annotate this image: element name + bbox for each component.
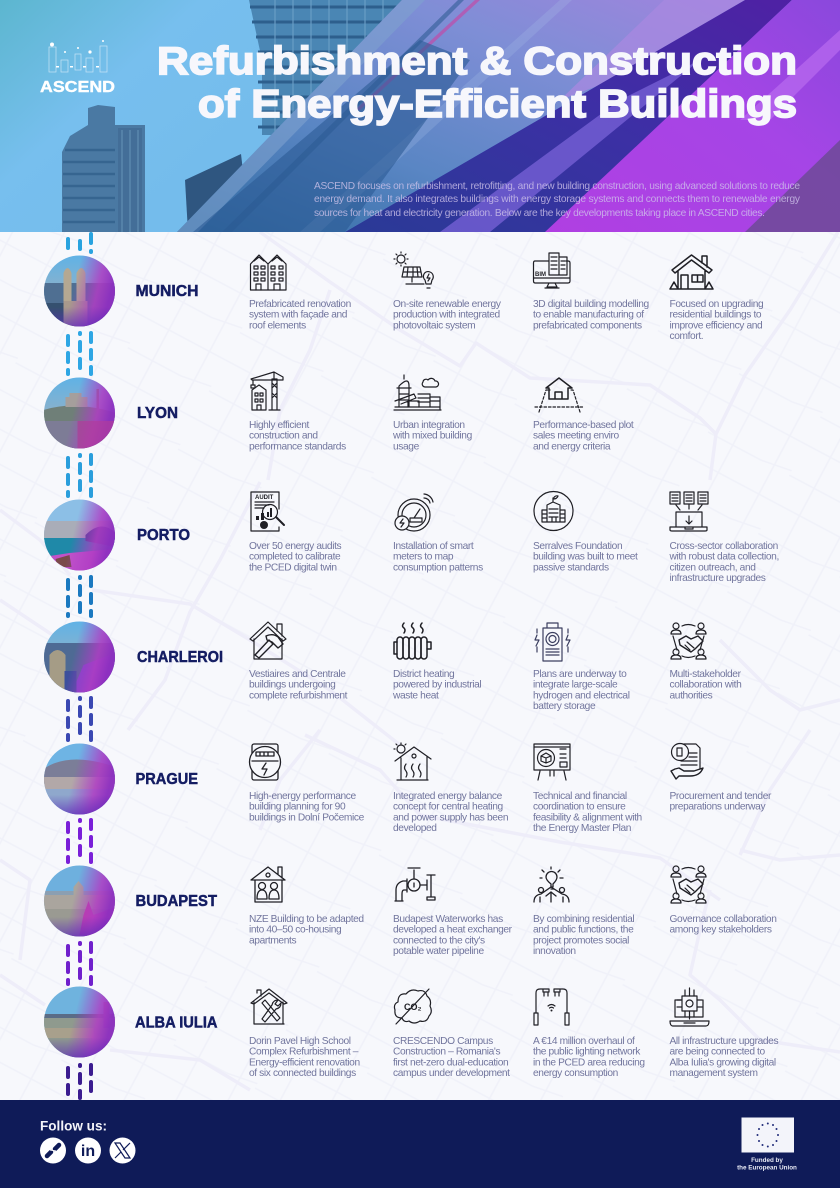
photo: Lyon <box>44 377 116 449</box>
caption: Urban integration <box>393 420 465 431</box>
logo: ASCEND <box>40 79 115 96</box>
caption: collaboration with <box>670 680 741 691</box>
caption: concept for central heating <box>393 802 504 813</box>
city labels: PORTO <box>137 527 190 544</box>
caption: Alba Iulia's growing digital <box>670 1057 776 1068</box>
caption: of six connected buildings <box>249 1068 356 1079</box>
EU flag <box>742 1118 794 1152</box>
caption: prefabricated components <box>533 320 642 331</box>
icon: digital laptop <box>670 988 709 1026</box>
icon: multi-stakeholder <box>671 623 706 659</box>
icon: audit <box>251 492 284 531</box>
icon: houses <box>250 255 286 290</box>
caption: management system <box>670 1068 758 1079</box>
caption: passive standards <box>533 562 609 573</box>
caption: usage <box>393 441 420 452</box>
caption: construction and <box>249 431 318 442</box>
caption: the PCED digital twin <box>249 562 337 573</box>
caption: integrate large-scale <box>533 680 618 691</box>
intro text <box>314 181 801 219</box>
city labels: ALBA IULIA <box>135 1014 218 1032</box>
header banner <box>0 0 840 232</box>
caption: developed <box>393 823 437 834</box>
row: Alba Iulia <box>249 988 778 1079</box>
icon: foundation building <box>534 492 573 530</box>
caption: Technical and financial <box>533 791 627 802</box>
icon: governance collaboration <box>671 866 706 903</box>
caption: District heating <box>393 669 455 680</box>
funded by text: the European Union <box>737 1164 797 1172</box>
caption: Budapest Waterworks has <box>393 914 503 925</box>
icon: BIM monitor <box>534 253 570 288</box>
caption: All infrastructure upgrades <box>670 1036 778 1047</box>
caption: Vestiaires and Centrale <box>249 669 346 680</box>
caption: authorities <box>670 690 713 701</box>
caption: building was built to meet <box>533 552 638 563</box>
title <box>157 40 797 126</box>
caption: coordination to ensure <box>533 802 626 813</box>
photo: Prague <box>44 743 116 815</box>
logo <box>40 40 115 96</box>
icon: hydrogen battery <box>535 623 570 661</box>
caption: are being connected to <box>670 1047 766 1058</box>
icon: urban mix <box>394 375 441 410</box>
caption: campus under development <box>393 1068 510 1079</box>
left tower <box>62 105 145 232</box>
caption: battery storage <box>533 701 596 712</box>
caption: developed a heat exchanger <box>393 925 513 936</box>
icon: tender document <box>671 744 703 779</box>
caption: meters to map <box>393 552 454 563</box>
photo: Charleroi <box>44 621 116 693</box>
caption: innovation <box>533 946 576 957</box>
caption: Governance collaboration <box>670 914 776 925</box>
caption: improve efficiency and <box>670 320 763 331</box>
tower top <box>249 0 410 135</box>
icon: home <box>670 255 713 289</box>
icon: data collection <box>670 492 708 531</box>
city labels: CHARLEROI <box>137 649 223 666</box>
city labels: PRAGUE <box>136 771 198 788</box>
row: Munich <box>249 252 764 342</box>
caption: citizen outreach, and <box>670 562 756 573</box>
title: of Energy-Efficient Buildings <box>198 83 797 126</box>
intro text: energy demand. It also integrates buildings with energy storage systems and connects them to renewable energy <box>314 194 801 205</box>
footer <box>0 1100 840 1188</box>
caption: project promotes social <box>533 935 629 946</box>
icon: radiator <box>394 623 431 659</box>
caption: potable water pipeline <box>393 946 484 957</box>
icon: link <box>40 1138 66 1164</box>
caption: roof elements <box>249 320 306 331</box>
row: Lyon <box>249 372 634 452</box>
caption: buildings in Dolní Počemice <box>249 812 365 823</box>
caption: Cross-sector collaboration <box>670 541 778 552</box>
caption: waste heat <box>392 690 439 701</box>
caption: residential buildings to <box>670 310 762 321</box>
caption: infrastructure upgrades <box>670 573 766 584</box>
caption: 3D digital building modelling <box>533 299 650 310</box>
photo: Porto <box>44 499 116 571</box>
icon: energy meter <box>250 744 280 780</box>
caption: photovoltaic system <box>393 320 475 331</box>
caption: Installation of smart <box>393 541 474 552</box>
caption: and public functions, the <box>533 925 634 936</box>
caption: Focused on upgrading <box>670 299 764 310</box>
row: Porto <box>249 492 779 584</box>
caption: Over 50 energy audits <box>249 541 342 552</box>
caption: feasibility & alignment with <box>533 812 642 823</box>
caption: NZE Building to be adapted <box>249 914 364 925</box>
caption: Serralves Foundation <box>533 541 622 552</box>
row: Prague <box>249 743 772 834</box>
icon: water pipeline <box>395 868 435 901</box>
caption: with mixed building <box>392 431 473 442</box>
caption: Prefabricated renovation <box>249 299 351 310</box>
icon: crane and building <box>251 372 283 410</box>
city labels: BUDAPEST <box>136 893 217 910</box>
caption: among key stakeholders <box>670 925 772 936</box>
caption: first net-zero dual-education <box>393 1057 508 1068</box>
icon: heated house <box>394 743 431 780</box>
caption: with robust data collection, <box>668 552 779 563</box>
city labels: LYON <box>137 405 178 422</box>
caption: comfort. <box>670 331 703 342</box>
intro text: sources for heat and electricity generation. Below are the key developments taking place in ASCEND cities. <box>314 208 765 219</box>
caption: to enable manufacturing of <box>533 310 644 321</box>
caption: Highly efficient <box>249 420 310 431</box>
caption: production with integrated <box>393 310 500 321</box>
caption: Integrated energy balance <box>393 791 503 802</box>
icon: solar panel and bulb <box>394 252 433 288</box>
intro text: ASCEND focuses on refurbishment, retrofitting, and new building construction, using advanced solutions to reduce <box>314 181 800 192</box>
icon: house with tools <box>251 989 287 1024</box>
caption: and energy criteria <box>533 441 611 452</box>
city labels <box>135 283 223 1032</box>
caption: performance standards <box>249 441 346 452</box>
caption: consumption patterns <box>393 562 483 573</box>
caption: hydrogen and electrical <box>533 690 630 701</box>
caption: sales meeting enviro <box>533 431 620 442</box>
map background <box>0 232 840 1100</box>
caption: and power supply has been <box>393 812 508 823</box>
caption: Performance-based plot <box>533 420 634 431</box>
icon: X <box>110 1138 136 1164</box>
dashed timeline <box>68 234 91 1098</box>
icon: presentation board <box>534 744 570 780</box>
caption: complete refurbishment <box>249 690 348 701</box>
caption: energy consumption <box>533 1068 618 1079</box>
caption: completed to calibrate <box>249 552 341 563</box>
caption: Multi-stakeholder <box>670 669 742 680</box>
caption: buildings undergoing <box>249 680 336 691</box>
caption: By combining residential <box>533 914 634 925</box>
caption: High-energy performance <box>249 791 356 802</box>
photo: Alba Iulia <box>44 986 116 1058</box>
row: Charleroi <box>249 622 742 712</box>
icon: plot with house <box>535 378 584 412</box>
icon: co-housing <box>251 867 285 902</box>
caption: On-site renewable energy <box>393 299 502 310</box>
icon: house with hammer <box>250 622 286 659</box>
photo: Budapest <box>44 865 116 937</box>
icon: audit: AUDIT <box>255 495 274 501</box>
caption: connected to the city's <box>393 935 485 946</box>
title: Refurbishment & Construction <box>157 40 797 83</box>
caption: the Energy Master Plan <box>533 823 631 834</box>
icon: street lights <box>534 989 569 1025</box>
caption: Dorin Pavel High School <box>249 1036 351 1047</box>
caption: building planning for 90 <box>249 802 346 813</box>
caption: Plans are underway to <box>533 669 627 680</box>
row: Budapest <box>249 866 776 957</box>
icon: LinkedIn: in <box>81 1143 95 1160</box>
caption: Complex Refurbishment – <box>249 1047 359 1058</box>
caption: apartments <box>249 935 296 946</box>
caption: preparations underway <box>670 802 766 813</box>
icon: BIM monitor: BIM <box>535 272 546 278</box>
caption: in the PCED area reducing <box>533 1057 645 1068</box>
icon: people and bulb <box>534 867 569 902</box>
funded by text: Funded by <box>751 1157 783 1164</box>
city labels: MUNICH <box>136 283 198 300</box>
caption: into 40–50 co-housing <box>249 925 342 936</box>
caption: Procurement and tender <box>670 791 772 802</box>
follow us heading: Follow us: <box>40 1118 107 1134</box>
caption: system with façade and <box>249 310 348 321</box>
photo: Munich <box>44 255 116 327</box>
caption: A €14 million overhaul of <box>533 1036 635 1047</box>
caption: powered by industrial <box>393 680 481 691</box>
caption: Energy-efficient renovation <box>249 1057 360 1068</box>
icon: smart meter <box>395 494 433 531</box>
caption: the public lighting network <box>533 1047 641 1058</box>
icon: CO2 cloud crossed out: CO₂ <box>404 1002 422 1012</box>
caption: CRESCENDO Campus <box>393 1036 493 1047</box>
icon: LinkedIn <box>75 1138 101 1164</box>
icon: CO2 cloud crossed out <box>394 989 431 1024</box>
caption: Construction – Romania's <box>393 1047 500 1058</box>
